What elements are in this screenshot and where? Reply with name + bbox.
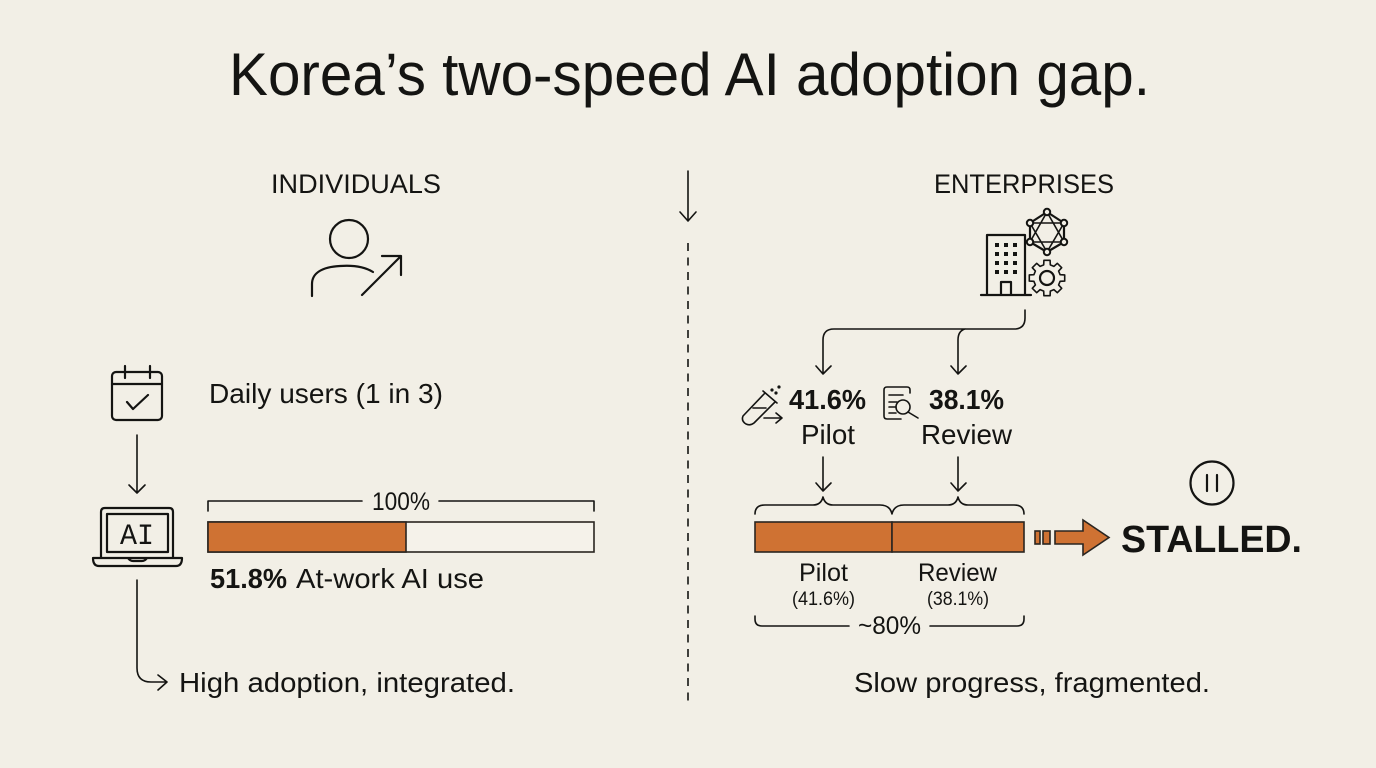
arrow: laptop to conclusion xyxy=(137,580,167,690)
stacked bar: pilot and review xyxy=(755,522,1024,552)
stat: pilot 41.6%: Pilot xyxy=(801,419,855,450)
arrow: calendar to laptop xyxy=(129,435,145,493)
icon: AI laptop xyxy=(93,508,182,566)
text: 51.8% at-work AI use: At-work AI use xyxy=(296,563,484,594)
label: review 38.1%: Review xyxy=(918,559,998,587)
center divider with arrow xyxy=(680,171,696,706)
label: pilot 41.6%: Pilot xyxy=(799,559,848,587)
panel: individuals xyxy=(93,169,594,698)
text: 51.8% at-work AI use xyxy=(210,563,484,594)
label: about 80%: ~80% xyxy=(858,612,921,640)
connector arrows: enterprises to pilot and review xyxy=(816,310,1025,374)
text: 51.8% at-work AI use: 51.8% xyxy=(210,563,287,594)
text: enterprises conclusion: Slow progress, fragmented. xyxy=(854,667,1210,698)
stat: pilot 41.6%: 41.6% xyxy=(789,384,866,415)
bar fill: 51.8% xyxy=(208,522,406,552)
heading: individuals: INDIVIDUALS xyxy=(271,169,441,199)
text: individuals conclusion: High adoption, integrated. xyxy=(179,667,515,698)
stat: review 38.1% xyxy=(921,384,1013,450)
arrow: bar to stalled xyxy=(1035,520,1109,555)
icon: calendar with check xyxy=(112,366,162,420)
braces above bar xyxy=(755,497,1024,514)
callout: stalled: STALLED. xyxy=(1121,519,1302,561)
label: pilot 41.6% xyxy=(792,559,855,610)
label: pilot 41.6%: (41.6%) xyxy=(792,589,855,610)
title: Korea’s two-speed AI adoption gap. xyxy=(229,41,1150,108)
text: daily users: Daily users (1 in 3) xyxy=(209,378,443,409)
stat: pilot 41.6% xyxy=(789,384,866,450)
icon: AI laptop: AI xyxy=(120,520,154,554)
label: review 38.1% xyxy=(918,559,998,610)
arrow: pilot to bar xyxy=(816,457,831,491)
bracket: 100% xyxy=(208,501,594,511)
icon: building with network and gear xyxy=(981,209,1067,296)
stat: review 38.1%: 38.1% xyxy=(929,384,1004,415)
bar track xyxy=(208,522,594,552)
icon: pause xyxy=(1190,462,1234,504)
icon: person with rising arrow xyxy=(312,220,401,296)
panel: enterprises xyxy=(742,169,1302,698)
icon: document search xyxy=(884,387,918,419)
icon: test tube xyxy=(742,386,782,425)
arrow: review to bar xyxy=(951,457,966,491)
label: review 38.1%: (38.1%) xyxy=(927,589,989,610)
stat: review 38.1%: Review xyxy=(921,419,1013,450)
heading: enterprises: ENTERPRISES xyxy=(934,169,1114,199)
label: 100%: 100% xyxy=(372,488,430,516)
bracket: about 80% xyxy=(755,616,1024,626)
bar chart: at-work AI use xyxy=(208,488,594,552)
